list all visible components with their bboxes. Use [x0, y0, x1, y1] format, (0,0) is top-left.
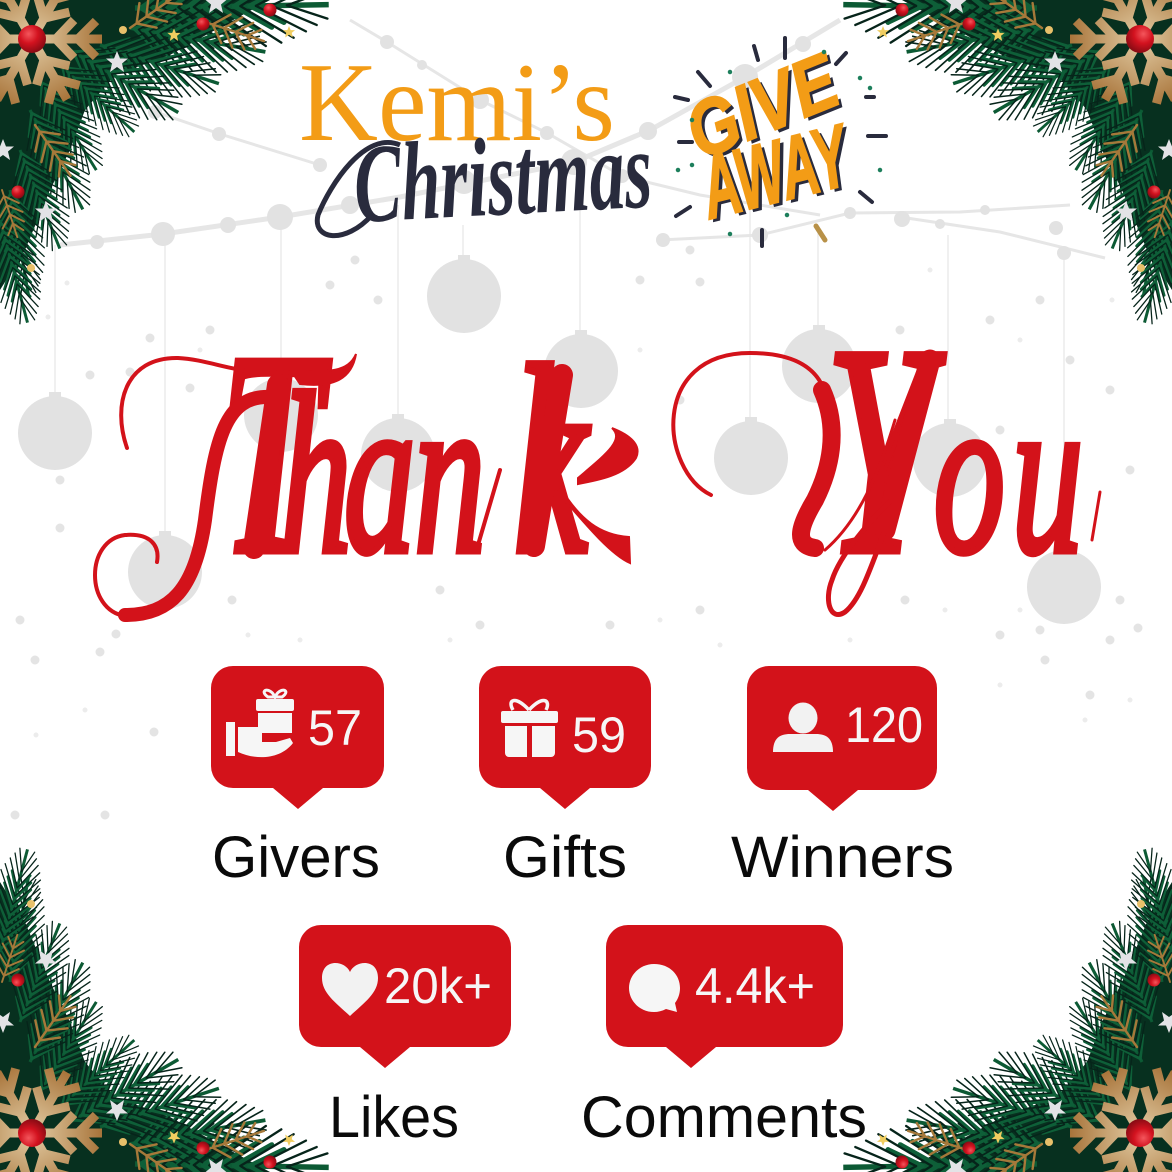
title: Thank You: u — [1012, 347, 1083, 601]
icon: heart — [322, 963, 378, 1016]
stat: Likes: 20k+ — [384, 958, 492, 1014]
title: Thank You: a — [344, 347, 415, 601]
corner: top-left pine and snowflake — [0, 0, 329, 329]
corner: top-right pine and snowflake — [843, 0, 1172, 329]
stat: Gifts — [479, 666, 651, 890]
title: Thank You: Y — [825, 284, 945, 616]
logo: Christmas: Christmas — [351, 108, 655, 247]
title: Thank You: T — [220, 294, 331, 615]
stat: Winners: 120 — [845, 697, 923, 753]
stat: Givers: Givers — [212, 825, 380, 890]
stat: Comments: Comments — [581, 1085, 867, 1150]
title: Thank You — [95, 284, 1100, 616]
stat: Likes — [299, 925, 511, 1150]
stat: Gifts: 59 — [572, 707, 626, 763]
title: Thank You: o — [934, 347, 1005, 601]
corner: bottom-right pine and snowflake — [843, 843, 1172, 1172]
stat: Gifts: Gifts — [503, 825, 627, 890]
icon: speech bubble — [629, 964, 680, 1012]
title: Thank You: k — [513, 311, 590, 610]
title: Thank You: h — [280, 347, 352, 601]
stat: Givers — [211, 666, 384, 890]
swash: T flourish — [95, 353, 1100, 616]
stat: Givers: 57 — [308, 700, 362, 756]
corner: bottom-left pine and snowflake — [0, 843, 329, 1172]
logo: Give Away lettering with burst: AWAY — [694, 108, 866, 241]
stat: Winners — [731, 666, 954, 890]
stat: Winners: Winners — [731, 825, 954, 890]
logo: Give Away lettering with burst: GIVE — [673, 35, 852, 176]
stat: Likes: Likes — [329, 1085, 459, 1150]
title: Thank You: n — [414, 347, 485, 601]
logo: Christmas — [317, 108, 655, 247]
background: strings, beads, baubles — [15, 20, 1138, 815]
stat: Comments — [581, 925, 867, 1150]
logo: Give Away lettering with burst: GIVE — [677, 38, 856, 179]
logo: Give Away lettering with burst — [673, 35, 886, 246]
logo: Give Away lettering with burst: AWAY — [690, 105, 862, 238]
logo: Kemi's: Kemi’s — [299, 41, 615, 165]
icon: gift box — [501, 701, 558, 757]
stat: Comments: 4.4k+ — [695, 958, 815, 1014]
icon: person — [773, 702, 833, 752]
icon: giving hand with gift — [226, 690, 294, 757]
